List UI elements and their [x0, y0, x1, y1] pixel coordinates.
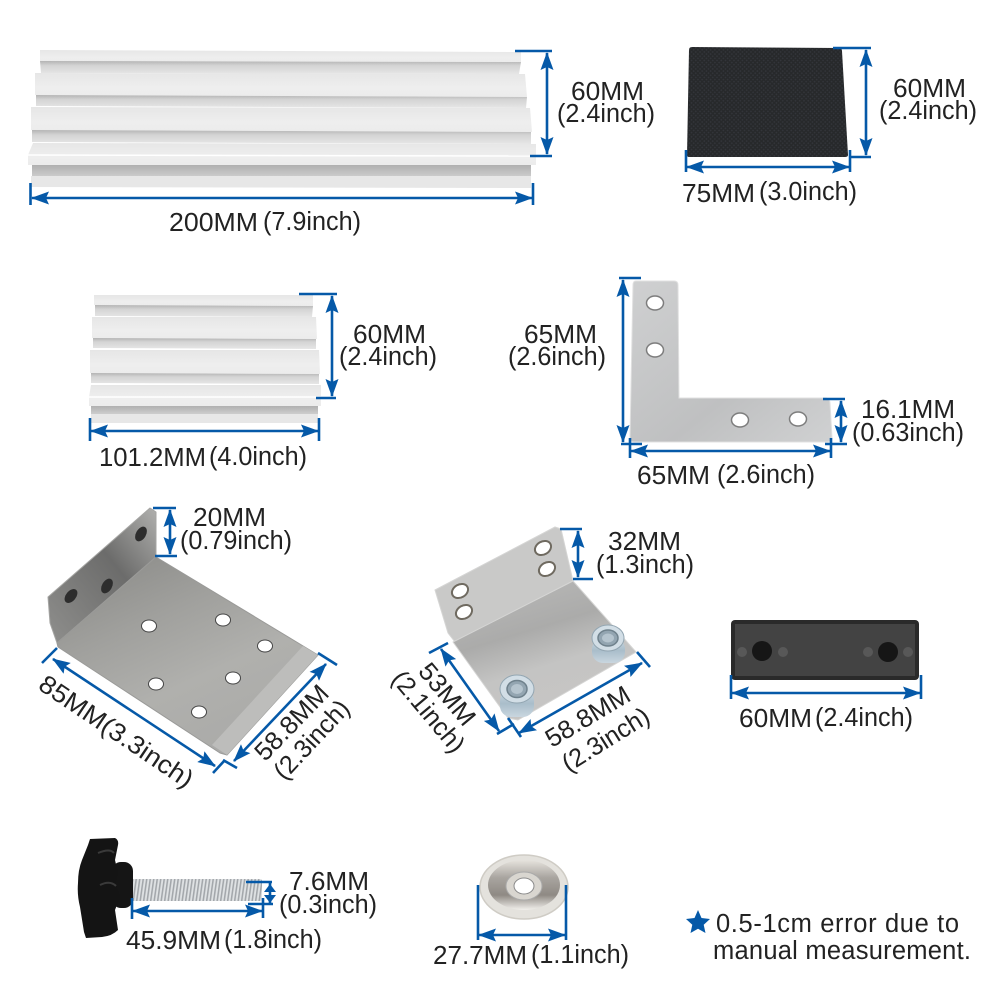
dimension: 27.7MM [478, 885, 566, 940]
dimension: 32MM [560, 529, 593, 579]
panel: small angle bracket with nuts [386, 527, 694, 778]
dimension: 85MM [42, 648, 225, 773]
dimension: 20MM [153, 508, 177, 556]
image: L plate [630, 281, 832, 442]
label: 2.4 inch: (2.4inch) [879, 97, 977, 125]
dimension: 75MM width [686, 150, 850, 172]
label: 65MM: 65MM [524, 321, 597, 349]
label: 45.9MM: 45.9MM [126, 927, 221, 955]
panel: L corner plate [508, 278, 964, 490]
label: 1.3 inch: (1.3inch) [596, 551, 694, 579]
label: 2.6 inch: (2.6inch) [508, 343, 606, 371]
panel: round washer [433, 855, 629, 970]
label: 75MM: 75MM [682, 180, 755, 208]
dimension: 7.6MM [246, 882, 276, 904]
text: note line one: 0.5-1cm error due to [716, 910, 959, 938]
panel: large angle bracket [34, 504, 356, 794]
dimension: 58.8MM [223, 653, 337, 768]
icon: nut rear [592, 625, 625, 663]
label: 32MM: 32MM [608, 528, 681, 556]
image: small bracket [435, 527, 636, 720]
dimension: 60MM [731, 675, 921, 699]
label: 0.63 inch: (0.63inch) [852, 419, 964, 447]
image: short aluminium profile [89, 295, 321, 423]
label: 101.2MM: 101.2MM [99, 444, 206, 472]
label: 4.0 inch: (4.0inch) [209, 443, 307, 471]
label: 2.1 inch: (2.1inch) [386, 665, 470, 759]
label: 60MM: 60MM [893, 75, 966, 103]
label: 7.9 inch: (7.9inch) [263, 208, 361, 236]
label: 0.3 inch: (0.3inch) [279, 891, 377, 919]
label: 2.4 inch: (2.4inch) [557, 100, 655, 128]
label: 2.3 inch: (2.3inch) [268, 695, 356, 785]
dimension: 101.2MM width [90, 418, 319, 441]
label: 1.8 inch: (1.8inch) [224, 926, 322, 954]
label: 65MM bottom: 65MM [637, 462, 710, 490]
label: 7.6MM: 7.6MM [289, 868, 369, 896]
label: 58.8MM: 58.8MM [541, 681, 635, 753]
label: 2.6 inch bottom: (2.6inch) [717, 461, 815, 489]
label: 3.0 inch: (3.0inch) [759, 178, 857, 206]
dimension: 200MM width [30, 183, 533, 205]
panel: measurement note [686, 910, 971, 965]
icon: nut front [500, 675, 534, 717]
image: knob bolt [78, 838, 262, 938]
dimension: 45.9MM [132, 898, 263, 919]
dimension: 60MM height [833, 48, 871, 157]
image: large bracket [48, 508, 318, 755]
label: 2.4 inch: (2.4inch) [339, 343, 437, 371]
label: 60MM: 60MM [571, 78, 644, 106]
panel: rubber pad [682, 47, 977, 208]
image: black rubber pad [687, 47, 848, 157]
panel: long aluminium profile 200MM [28, 50, 655, 237]
image: dome washer [480, 855, 568, 919]
label: 85MM 3.3 inch: 85MM(3.3inch) [34, 670, 198, 794]
label: 200MM: 200MM [169, 209, 258, 237]
text: note line two: manual measurement. [713, 937, 971, 965]
dimension: 53MM [429, 643, 514, 734]
dimension: 65MM width [630, 438, 831, 458]
image: long aluminium profile [28, 50, 536, 188]
dimension: 60MM height [515, 51, 552, 156]
label: 60MM: 60MM [739, 705, 812, 733]
label: 2.4 inch: (2.4inch) [815, 704, 913, 732]
label: 16.1MM: 16.1MM [861, 396, 955, 424]
label: 58.8MM: 58.8MM [249, 679, 335, 767]
panel: black plate [731, 620, 921, 733]
dimension: 16.1MM [823, 399, 847, 444]
panel: short aluminium profile [89, 294, 437, 472]
dimension: 60MM height [299, 294, 337, 398]
dimension: 65MM height [619, 278, 642, 444]
image: black end plate [731, 620, 919, 680]
label: 60MM: 60MM [353, 321, 426, 349]
label: 0.79 inch: (0.79inch) [180, 527, 292, 555]
icon: blue star [686, 910, 710, 933]
label: 1.1 inch: (1.1inch) [531, 941, 629, 969]
label: 2.3 inch: (2.3inch) [557, 702, 655, 778]
dimension: 58.8MM [508, 652, 650, 737]
label: 53MM: 53MM [412, 658, 481, 732]
panel: knob screw [78, 838, 377, 955]
label: 20MM: 20MM [193, 504, 266, 532]
label: 27.7MM: 27.7MM [433, 942, 527, 970]
